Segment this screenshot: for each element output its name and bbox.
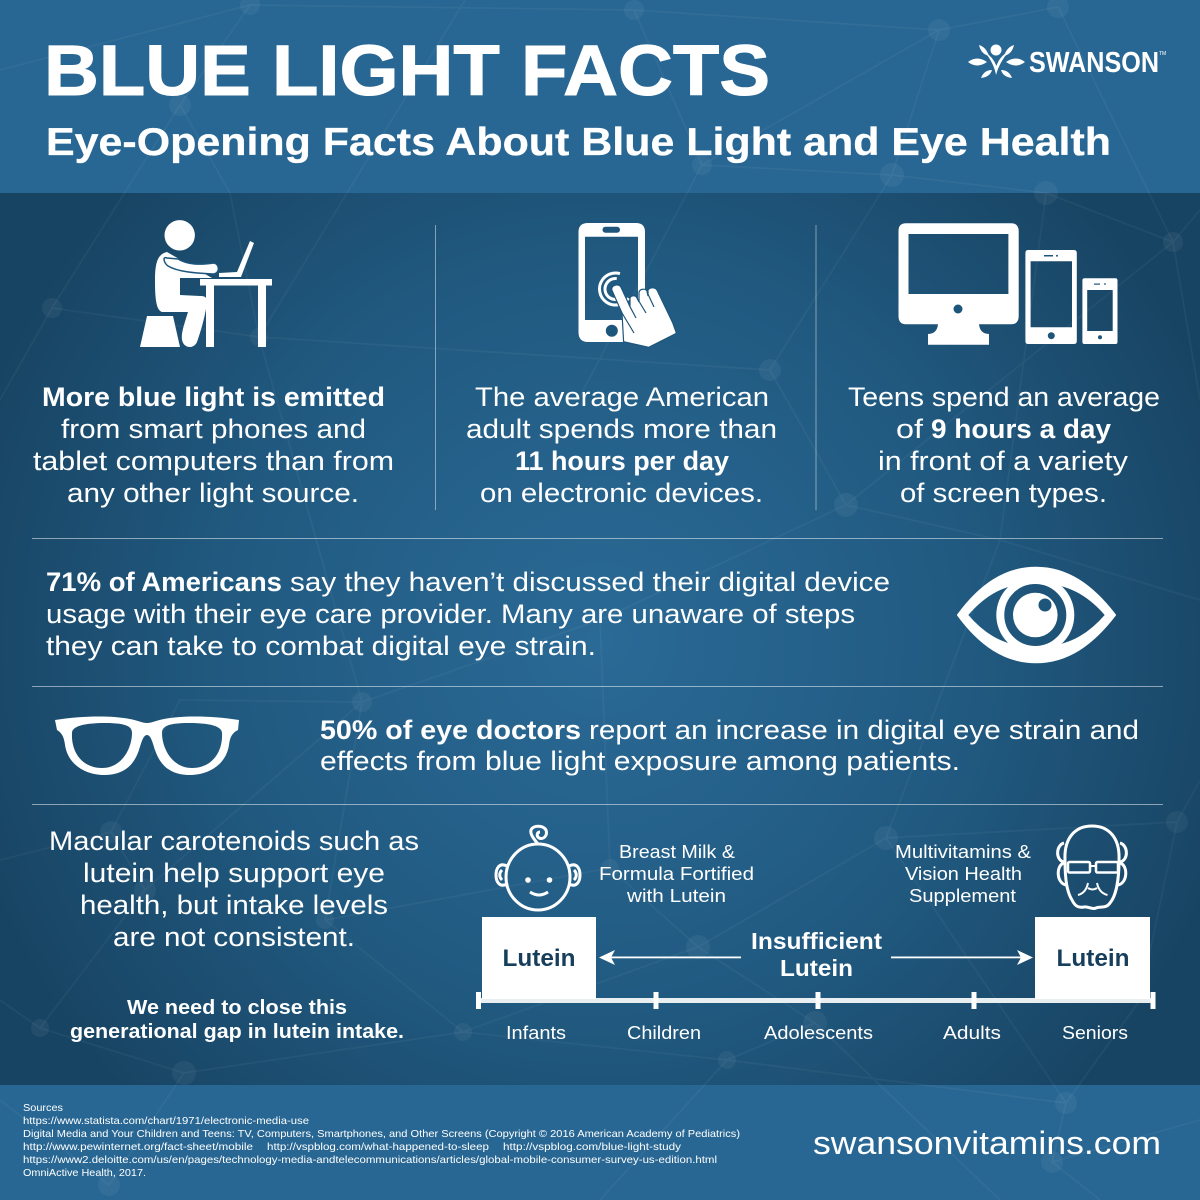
icon: monitor, tablet and phone	[898, 223, 1118, 345]
row divider	[32, 804, 1163, 805]
text: 71% of Americans	[46, 567, 890, 661]
text: macular carotenoids	[49, 826, 419, 952]
icon: senior face with glasses	[1058, 826, 1126, 909]
logo: Swanson: SWANSON	[1029, 47, 1159, 79]
column divider	[816, 225, 817, 510]
text: blue light emitted: tablet computers than from	[33, 446, 394, 476]
text: breast milk and formula: Breast Milk &	[619, 841, 736, 862]
sources: https://www.statista.com/chart/1971/electronic-media-use	[23, 1115, 309, 1127]
icon: glasses	[55, 716, 239, 775]
header band	[0, 0, 1200, 193]
sources: https://www2.deloitte.com/us/en/pages/technology-media-andtelecommunications/articles/global-mobile-consumer-survey-us-edition.html	[23, 1154, 717, 1166]
text: macular carotenoids: lutein help support eye	[83, 858, 385, 888]
text: 71% of Americans: usage with their eye care provider. Many are unaware of steps	[46, 599, 855, 629]
text: breast milk and formula: Formula Fortified	[599, 863, 754, 884]
text: 71% of Americans: say they haven’t discussed their digital device	[290, 567, 890, 597]
text: multivitamins and supplement: Vision Health	[905, 863, 1022, 884]
icon: eye	[958, 568, 1115, 662]
text: blue light emitted	[33, 382, 394, 508]
logo: Swanson: TM	[1159, 51, 1166, 57]
timeline labels: Seniors	[1062, 1022, 1128, 1043]
text: 71% of Americans: 71% of Americans	[46, 567, 282, 597]
text: blue light emitted: from smart phones and	[61, 414, 366, 444]
sources: http://www.pewinternet.org/fact-sheet/mobile	[23, 1141, 253, 1153]
footer band	[0, 1085, 1200, 1200]
website url: swansonvitamins.com	[813, 1125, 1161, 1161]
text: macular carotenoids: are not consistent.	[113, 922, 355, 952]
text: generational gap: We need to close this	[127, 997, 347, 1019]
text: multivitamins and supplement	[895, 841, 1032, 906]
text: teen screen hours: Teens spend an average	[848, 382, 1160, 412]
label: insufficient lutein: Insufficient	[751, 928, 882, 954]
arrow: right	[891, 950, 1033, 965]
sources: http://vspblog.com/blue-light-study	[503, 1141, 682, 1153]
sources: OmniActive Health, 2017.	[23, 1167, 146, 1179]
lutein box: seniors	[1035, 917, 1150, 999]
text: adult device hours: adult spends more than	[466, 414, 777, 444]
text: breast milk and formula: with Lutein	[626, 885, 726, 906]
text: generational gap	[70, 997, 404, 1043]
sources: Sources	[23, 1102, 63, 1114]
text: blue light emitted: More blue light is emitted	[42, 382, 385, 412]
text: 71% of Americans: they can take to combat digital eye strain.	[46, 631, 596, 661]
text: 50% of eye doctors: 50% of eye doctors	[320, 715, 581, 745]
text: teen screen hours	[848, 382, 1160, 508]
title: BLUE LIGHT FACTS	[44, 32, 770, 111]
text: 50% of eye doctors: report an increase in digital eye strain and	[589, 715, 1139, 745]
label: insufficient lutein: Lutein	[780, 955, 853, 981]
text: teen screen hours: in front of a variety	[878, 446, 1129, 476]
text: 50% of eye doctors	[320, 715, 1139, 776]
timeline labels: Adolescents	[764, 1022, 873, 1043]
text: adult device hours: The average American	[475, 382, 769, 412]
timeline	[476, 992, 1156, 1009]
lutein box: infants	[482, 917, 596, 999]
logo: Swanson	[968, 44, 1166, 79]
sources: Digital Media and Your Children and Teens: TV, Computers, Smartphones, and Other Screens (Copyright © 2016 American Academy of Pediatrics)	[23, 1128, 740, 1140]
icon: baby face	[496, 826, 580, 910]
lutein box: infants: Lutein	[502, 945, 576, 972]
text: adult device hours: 11 hours per day	[515, 446, 729, 476]
timeline labels: Infants	[506, 1022, 566, 1043]
text: macular carotenoids: health, but intake levels	[80, 890, 388, 920]
text: multivitamins and supplement: Supplement	[909, 885, 1016, 906]
icon: smartphone with touching hand	[578, 223, 676, 347]
timeline labels: Children	[627, 1022, 701, 1043]
text: adult device hours: on electronic devices.	[480, 478, 763, 508]
text: breast milk and formula	[599, 841, 754, 906]
text: teen screen hours: of screen types.	[900, 478, 1107, 508]
lutein box: seniors: Lutein	[1056, 945, 1130, 972]
text: adult device hours	[466, 382, 777, 508]
sources: http://vspblog.com/what-happened-to-sleep	[267, 1141, 489, 1153]
label: insufficient lutein	[751, 928, 882, 981]
timeline labels	[506, 1022, 1128, 1043]
subtitle: Eye-Opening Facts About Blue Light and Eye Health	[46, 121, 1111, 164]
text: generational gap: generational gap in lutein intake.	[70, 1021, 404, 1043]
sources	[23, 1102, 740, 1179]
text: teen screen hours: 9 hours a day	[931, 414, 1111, 444]
column divider	[435, 225, 436, 510]
icon: person at laptop	[140, 220, 272, 347]
row divider	[32, 538, 1163, 539]
text: teen screen hours: of	[896, 414, 924, 444]
text: macular carotenoids: Macular carotenoids such as	[49, 826, 419, 856]
arrow: left	[599, 950, 741, 965]
row divider	[32, 686, 1163, 687]
text: 50% of eye doctors: effects from blue light exposure among patients.	[320, 746, 960, 776]
timeline labels: Adults	[943, 1022, 1001, 1043]
text: blue light emitted: any other light source.	[67, 478, 359, 508]
text: multivitamins and supplement: Multivitamins &	[895, 841, 1032, 862]
